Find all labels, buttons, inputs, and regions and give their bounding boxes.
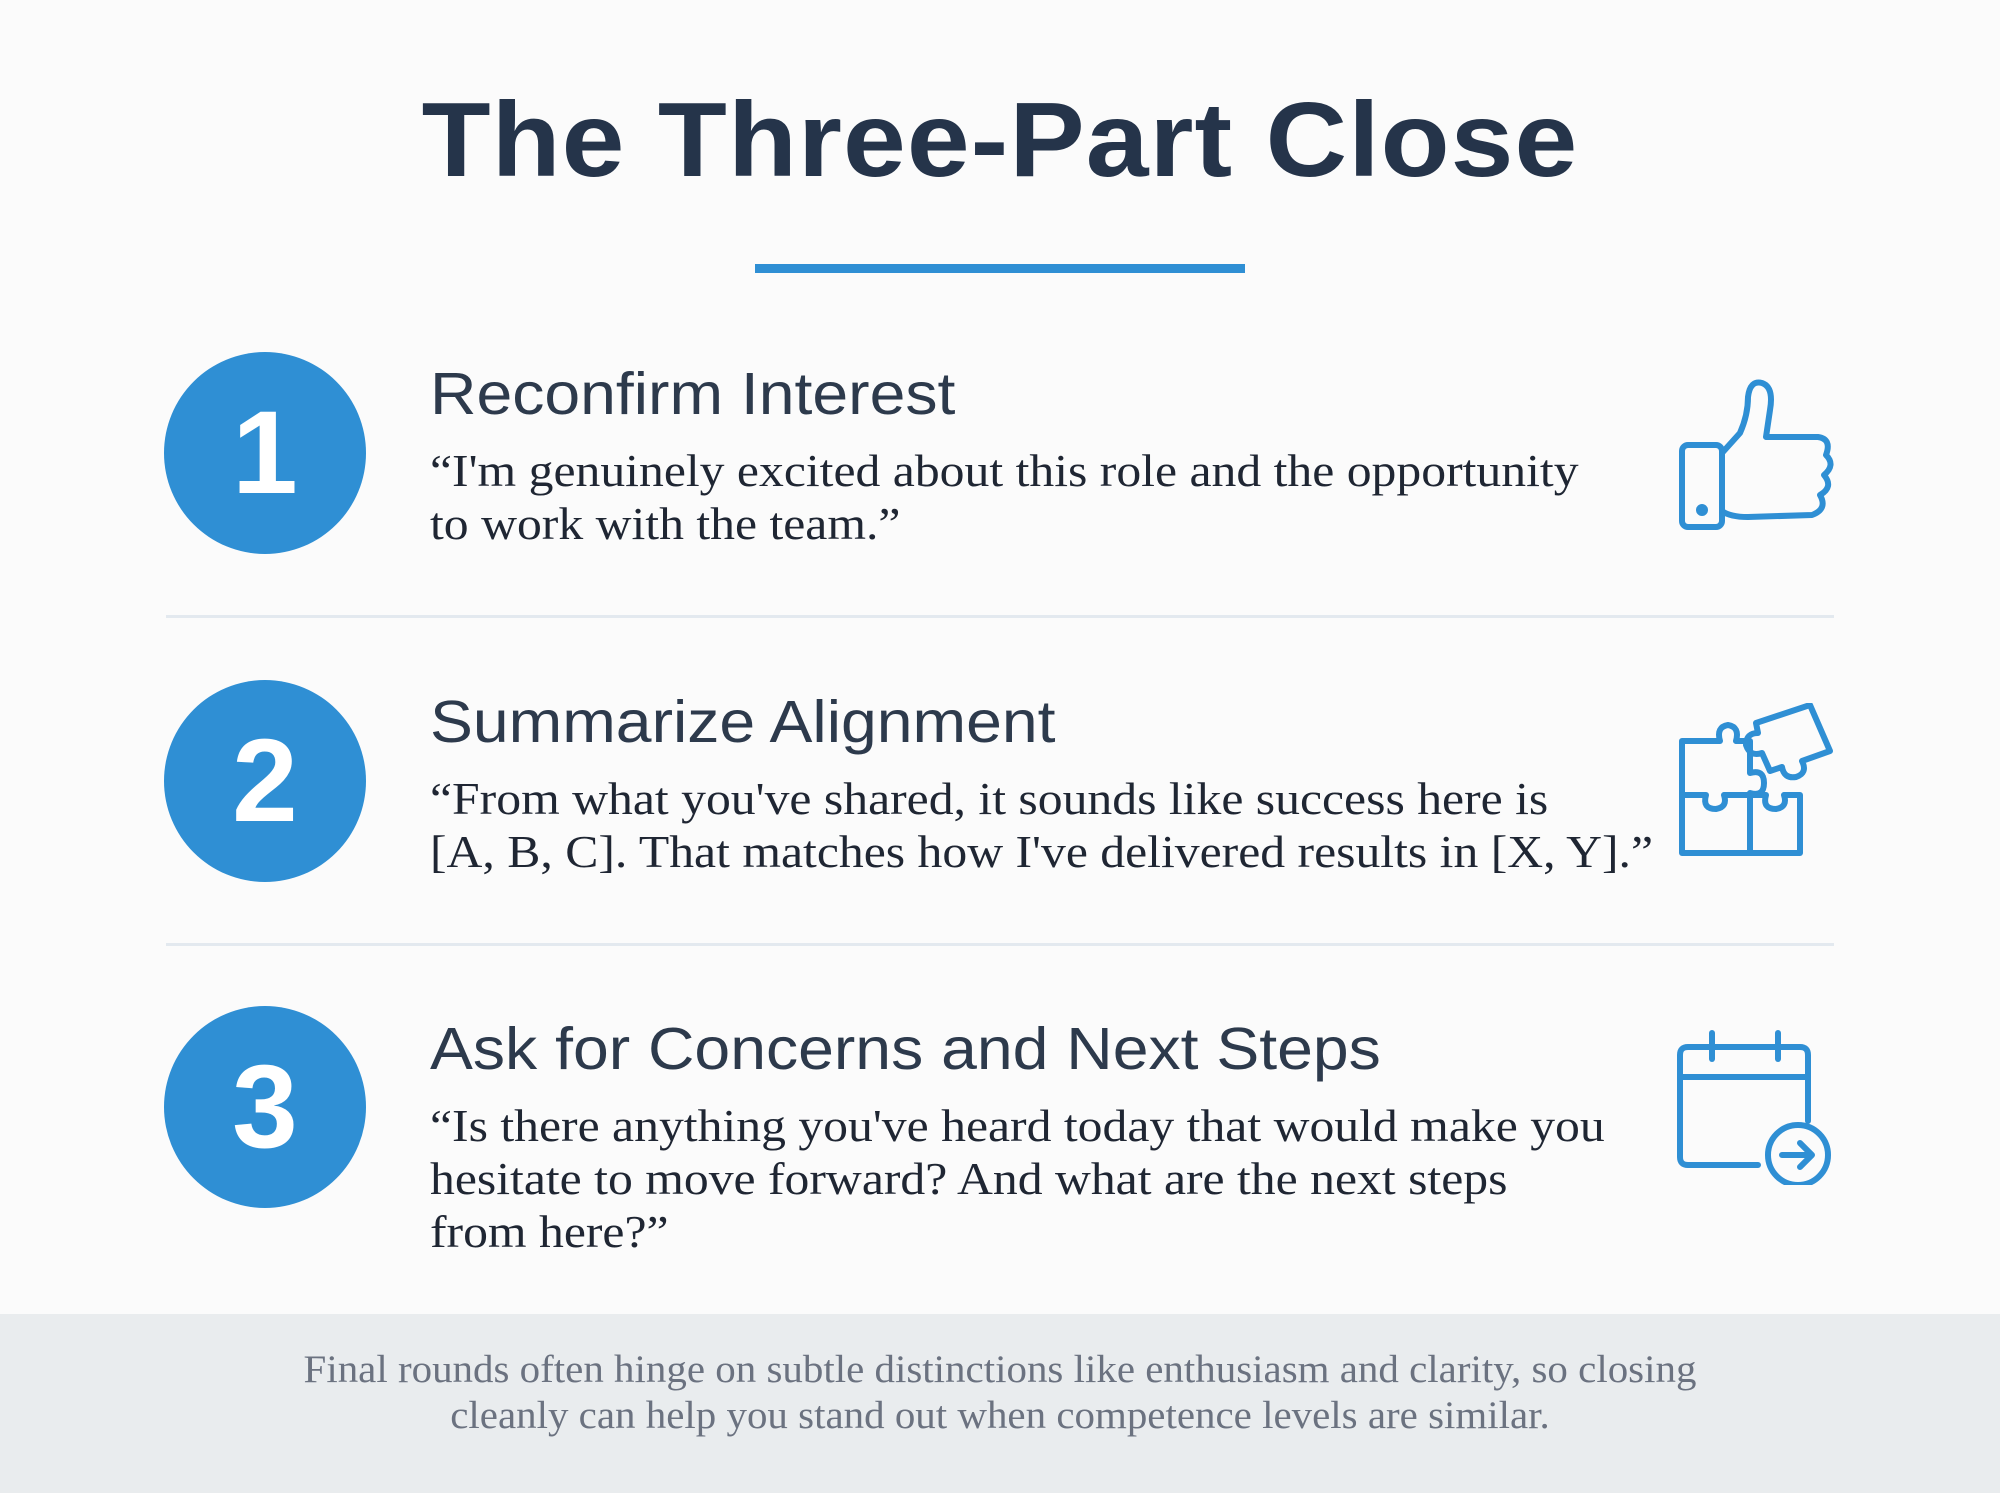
quote 3: “Is there anything you've heard today that would make you (430, 1100, 1605, 1151)
quote 2 (430, 773, 1653, 877)
quote 2: “From what you've shared, it sounds like success here is (430, 773, 1548, 824)
footer text: Final rounds often hinge on subtle distinctions like enthusiasm and clarity, so closing (304, 1348, 1696, 1391)
quote 1: “I'm genuinely excited about this role and the opportunity (430, 445, 1579, 496)
number circle 1 (164, 352, 366, 554)
number circle 2 (164, 680, 366, 882)
quote 3: from here?” (430, 1206, 669, 1257)
footer band (0, 1314, 2000, 1493)
divider (166, 615, 1834, 618)
number circle 2: 2 (232, 715, 298, 847)
heading 3: Ask for Concerns and Next Steps (430, 1016, 1381, 1082)
divider (166, 943, 1834, 946)
footer text: cleanly can help you stand out when competence levels are similar. (450, 1394, 1550, 1437)
icon: calendar with arrow (1677, 1030, 1831, 1185)
number circle 3 (164, 1006, 366, 1208)
quote 1: to work with the team.” (430, 498, 900, 549)
icon: thumbs up (1679, 380, 1834, 530)
quote 3 (430, 1100, 1605, 1257)
icon: puzzle (1679, 703, 1833, 856)
step 2 (164, 680, 1833, 882)
number circle 3: 3 (232, 1041, 298, 1173)
quote 2: [A, B, C]. That matches how I've delivered results in [X, Y].” (430, 826, 1653, 877)
quote 1 (430, 445, 1579, 549)
heading 2: Summarize Alignment (430, 689, 1055, 755)
title: The Three-Part Close (422, 81, 1578, 199)
title underline (755, 264, 1245, 273)
heading 1: Reconfirm Interest (430, 361, 955, 427)
number circle 1: 1 (232, 387, 298, 519)
footer text (304, 1348, 1696, 1437)
step 1 (164, 352, 1834, 554)
step 3 (164, 1006, 1831, 1257)
quote 3: hesitate to move forward? And what are the next steps (430, 1153, 1507, 1204)
